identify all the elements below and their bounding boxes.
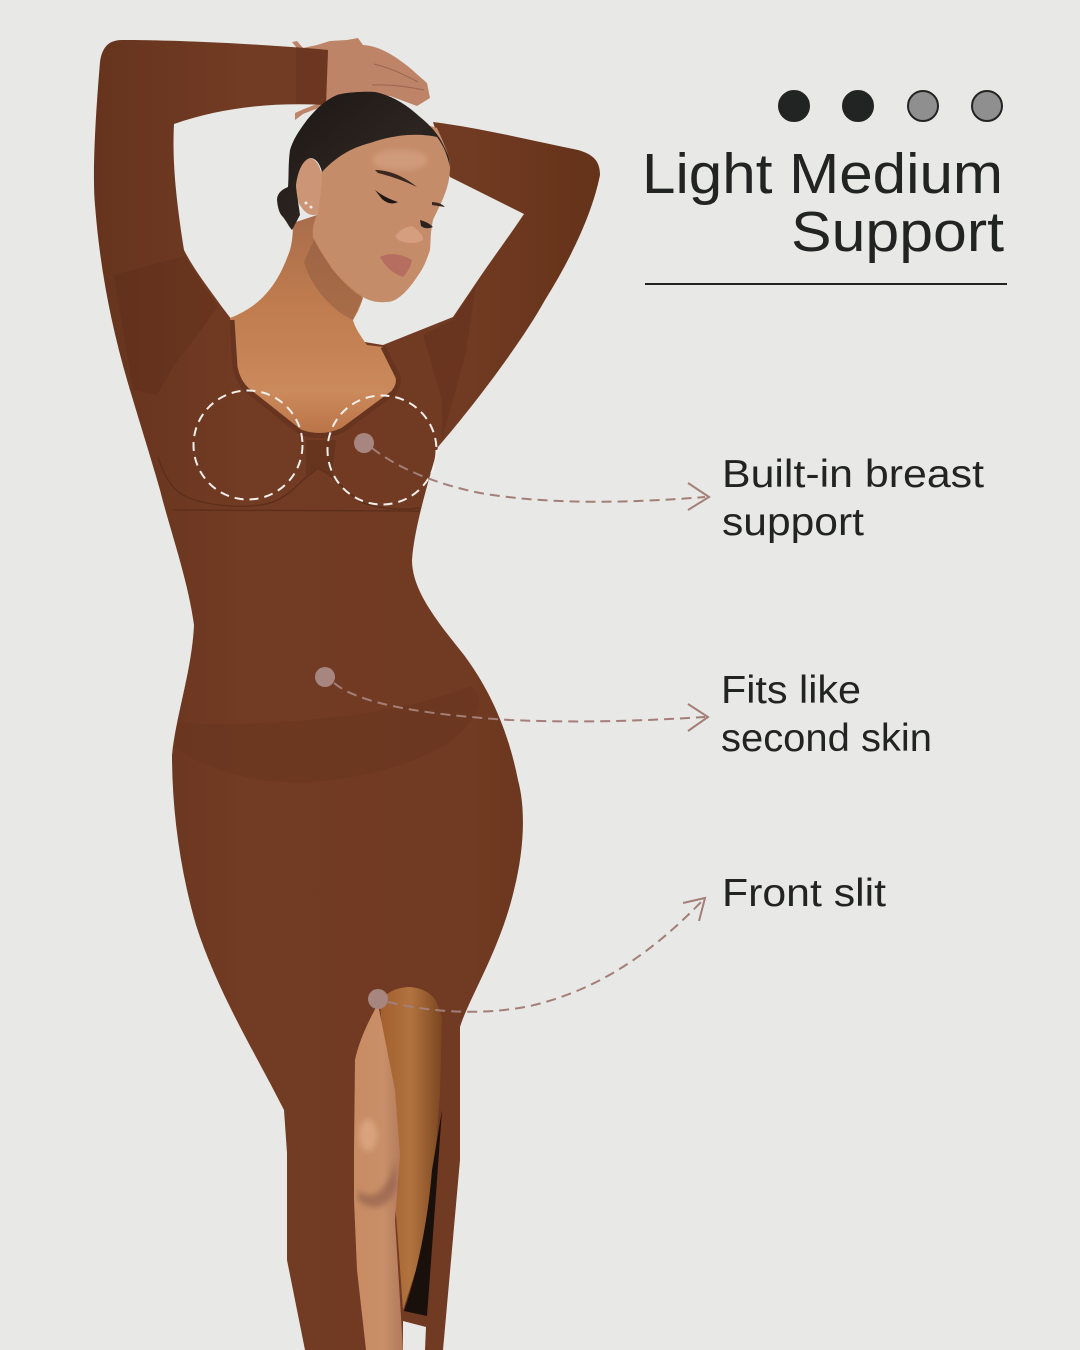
- model figure: [94, 38, 600, 1350]
- neck shadow: [304, 238, 363, 320]
- title: Support: [791, 200, 1004, 264]
- title underline: [645, 283, 1007, 285]
- slit: shadow opening: [404, 1110, 442, 1316]
- face: [313, 123, 450, 302]
- neckline trim: [232, 320, 398, 436]
- callout: second skin: second skin: [721, 717, 932, 760]
- callout: built-in breast support: support: [722, 501, 864, 544]
- label: Front slit: [722, 872, 886, 915]
- earrings: [304, 202, 312, 208]
- label: Fits like: [721, 669, 861, 712]
- slit: back leg: [380, 987, 442, 1310]
- dashed circle: right cup: [328, 396, 436, 504]
- slit: background below hem: [403, 1321, 426, 1350]
- dashed arrow: [334, 683, 708, 731]
- ear: [295, 158, 322, 215]
- neck and chest skin: [230, 215, 398, 437]
- callout: built-in breast support: [354, 433, 984, 544]
- facial features: [375, 170, 445, 277]
- callout: front slit: [368, 872, 886, 1012]
- knee shading: [358, 1160, 397, 1207]
- marker dot: [368, 989, 388, 1009]
- label: Built-in breast: [722, 453, 984, 496]
- center gore texture: [306, 440, 336, 478]
- dashed arrow: [372, 448, 709, 510]
- callout: second skin: [315, 667, 932, 760]
- forehead highlight: [372, 150, 428, 170]
- slit: front leg: [354, 1004, 403, 1350]
- dashed arrow: [388, 898, 705, 1012]
- title: Light Medium: [642, 142, 1003, 206]
- left sleeve shading: [114, 256, 218, 395]
- right sleeve shading: [423, 285, 476, 440]
- support rating dots: [779, 91, 1002, 121]
- cuff gathered shading: [296, 47, 328, 105]
- hand on head: [292, 38, 430, 120]
- title: [642, 142, 1004, 264]
- dress sleeves and body: [94, 40, 600, 1350]
- marker dot: [354, 433, 374, 453]
- marker dot: [315, 667, 335, 687]
- bra band line: [158, 457, 420, 511]
- hair: [277, 92, 450, 230]
- waistband shading: [174, 686, 479, 782]
- dashed circle: left cup: [194, 390, 302, 500]
